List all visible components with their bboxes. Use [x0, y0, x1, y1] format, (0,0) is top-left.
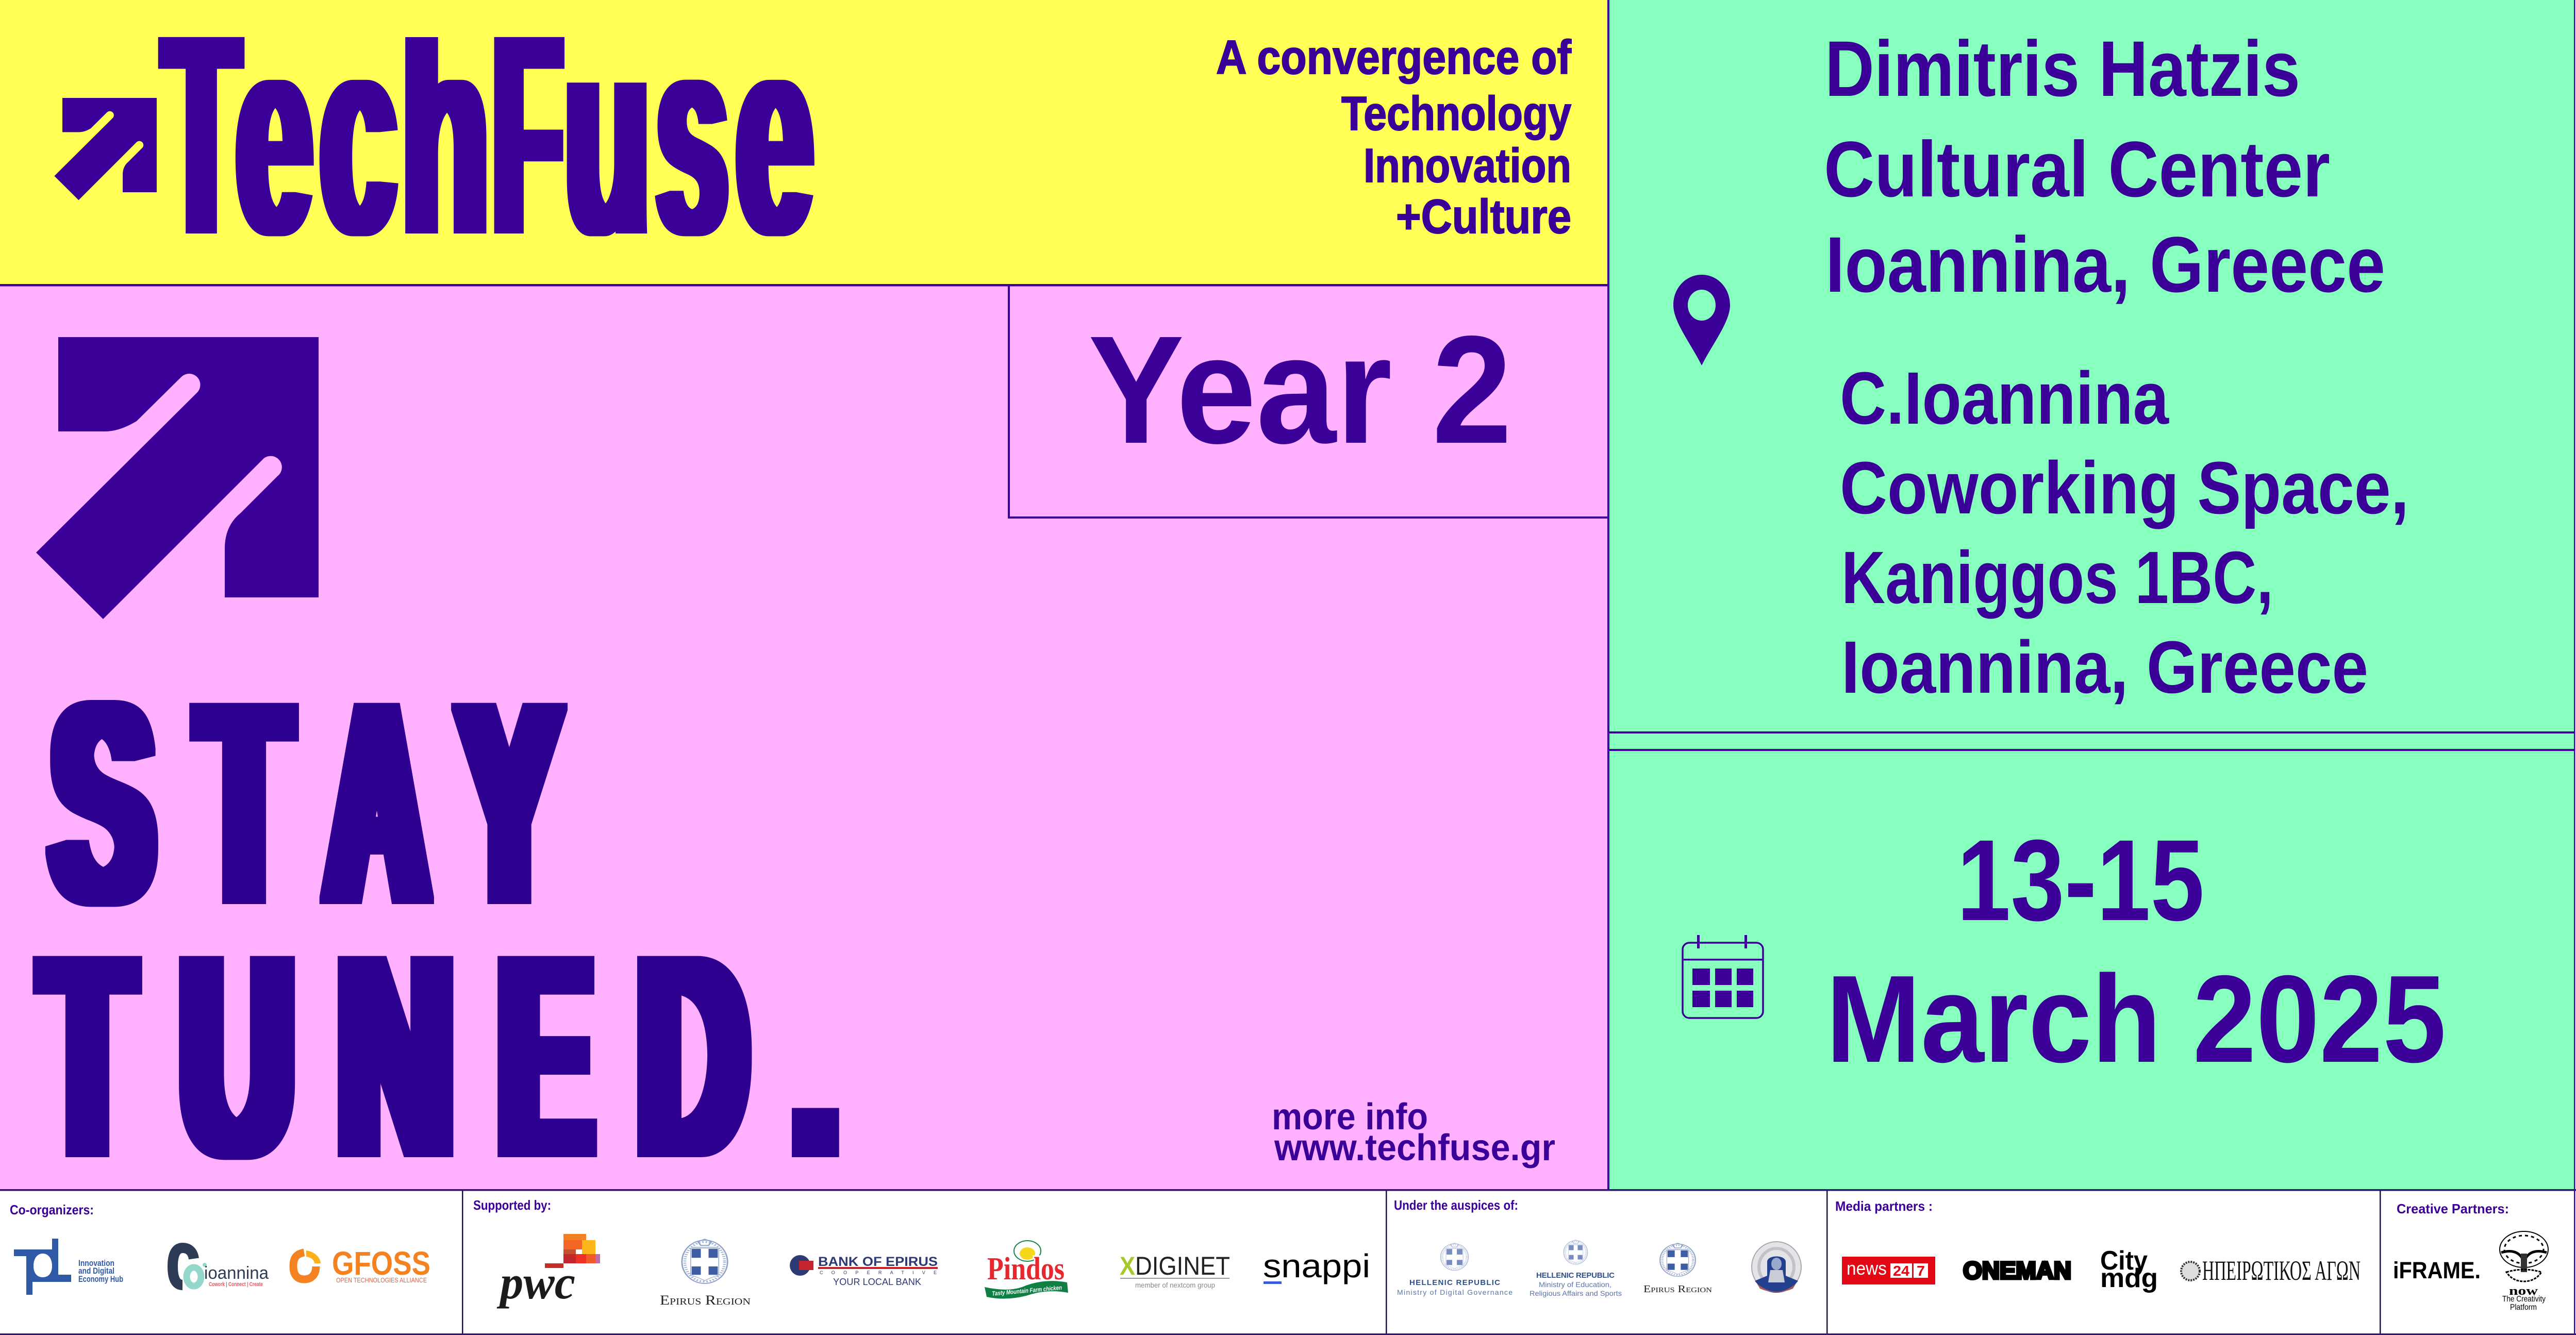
text block: dates: [1826, 816, 2446, 1089]
heading: TUNED.: D: [639, 898, 747, 1213]
heading: TUNED.: .: [791, 898, 840, 1213]
logo: pd Innovation and Digital Economy Hub: [14, 1239, 123, 1295]
logo: news247: [1842, 1257, 1935, 1284]
logo: news247: 7: [1917, 1263, 1925, 1279]
text block: venue 1: Cultural Center: [1824, 125, 2330, 213]
text block: venue 1: Ioannina, Greece: [1825, 221, 2385, 309]
logo: Bank of Epirus: BANK OF EPIRUS: [818, 1255, 938, 1269]
text block: dates: March 2025: [1826, 950, 2446, 1089]
logo: Pindos: Tasty Mountain Farm chicken: [992, 1284, 1062, 1297]
text block: venue 2: Kaniggos 1BC,: [1841, 536, 2273, 619]
logo: now tree: Platform: [2510, 1303, 2537, 1312]
logo: City mdg: mdg: [2100, 1263, 2158, 1293]
icon: calendar: [1683, 935, 1763, 1018]
logo: C ioannina: Cowork | Connect | Create: [209, 1281, 263, 1288]
heading: Creative Partners: Creative Partners:: [2397, 1201, 2509, 1216]
text block: more info: more info: [1272, 1096, 1428, 1138]
text block: tagline: [1216, 30, 1572, 243]
logo: City mdg: [2100, 1246, 2158, 1293]
logo: Epirus Region small: Epirus Region: [1643, 1283, 1712, 1295]
heading: STAY: T: [199, 645, 289, 960]
logo: Ministry of Education: HELLENIC REPUBLIC: [1536, 1271, 1615, 1280]
logo: Pindos: Pindos: [987, 1251, 1065, 1287]
logo: Ministry of Education: [1530, 1240, 1622, 1297]
heading: Co-organizers: Co-organizers:: [10, 1202, 94, 1217]
logo: pd Innovation and Digital Economy Hub: Economy Hub: [78, 1274, 123, 1284]
text block: tagline: A convergence of: [1216, 30, 1572, 84]
logo: City mdg: City: [2100, 1246, 2148, 1276]
logo: now tree: now: [2509, 1284, 2538, 1298]
logo: PwC: pwc: [496, 1256, 575, 1309]
logo: Ministry of Digital Governance: HELLENIC REPUBLIC: [1409, 1278, 1500, 1287]
text block: dates: 13-15: [1957, 816, 2204, 945]
text block: more info: www.techfuse.gr: [1274, 1127, 1555, 1169]
logo: XDIGINET: member of nextcom group: [1135, 1281, 1215, 1289]
logo: XDIGINET: DIGINET: [1135, 1251, 1230, 1280]
logo: snappi: snappi: [1263, 1247, 1370, 1284]
text block: venue 1: Dimitris Hatzis: [1825, 25, 2300, 113]
logo: Ipeirotikos Agon: ΗΠΕΙΡΩΤΙΚΟΣ ΑΓΩΝ: [2202, 1255, 2361, 1286]
text block: more info: [1272, 1096, 1555, 1169]
logo: Ministry of Education: Religious Affairs and Sports: [1530, 1289, 1622, 1297]
panel: pink main: [0, 286, 1607, 1190]
logo: GFOSS: OPEN TECHNOLOGIES ALLIANCE: [336, 1276, 427, 1284]
heading: TUNED.: T: [42, 898, 132, 1213]
panel: green venue background: [1609, 0, 2574, 1189]
logo: now tree: The Creativity: [2502, 1295, 2546, 1304]
logo: XDIGINET: X: [1120, 1251, 1135, 1280]
text block: tagline: Innovation: [1364, 139, 1571, 192]
logo: news247: news: [1847, 1258, 1887, 1279]
panel: Year 2 box: [1009, 285, 1608, 518]
icon: location pin: [1673, 275, 1730, 365]
logo: GFOSS: [293, 1245, 430, 1284]
heading: STAY: A: [327, 645, 426, 960]
logo: pd Innovation and Digital Economy Hub: and Digital: [78, 1266, 114, 1276]
text block: tagline: Technology: [1341, 87, 1571, 140]
logo: Bank of Epirus: [790, 1255, 938, 1287]
logo: C ioannina: ioannina: [204, 1263, 269, 1283]
logo: Ministry of Digital Governance: Ministry of Digital Governance: [1397, 1288, 1513, 1296]
logo: Pindos: [985, 1241, 1068, 1299]
heading: TUNED.: N: [338, 898, 453, 1213]
logo: XDIGINET: [1120, 1251, 1230, 1289]
text block: venue 1: [1824, 25, 2385, 309]
panel: white partner strip: [0, 1191, 2576, 1333]
logo: GFOSS: GFOSS: [332, 1245, 430, 1282]
logo: ONEMAN: ONEMAN: [1963, 1257, 2071, 1284]
logo: Ministry of Digital Governance: [1397, 1243, 1513, 1296]
logo: Epirus Region: [660, 1239, 751, 1308]
logo: news247: 24: [1893, 1263, 1909, 1279]
heading: STAY: S: [52, 645, 153, 960]
icon: small TechFuse arrow: [54, 98, 157, 200]
heading: TUNED.: U: [181, 898, 293, 1213]
logo: Bank of Epirus: YOUR LOCAL BANK: [833, 1277, 921, 1287]
logo: Bank of Epirus: COOPERATIVE: [820, 1270, 937, 1275]
text block: venue 2: Ioannina, Greece: [1841, 626, 2368, 709]
icon: large arrow: [36, 337, 319, 619]
heading: STAY: Y: [460, 645, 559, 960]
logo: iFRAME: iFRAME.: [2393, 1257, 2481, 1283]
logo: now tree: [2500, 1231, 2548, 1312]
heading: Media partners: Media partners :: [1835, 1198, 1933, 1214]
logo: Ipeirotikos Agon: [2181, 1255, 2361, 1286]
heading: TUNED.: E: [500, 898, 591, 1213]
logo: pd Innovation and Digital Economy Hub: Innovation: [78, 1258, 114, 1268]
logo: C ioannina: [173, 1248, 269, 1288]
logo: Ioannina seal: [1752, 1242, 1801, 1293]
text block: venue 2: [1840, 357, 2409, 709]
logo: PwC: [496, 1234, 600, 1309]
heading: Under the auspices of: Under the auspices of:: [1394, 1197, 1518, 1213]
panel: yellow header: [0, 0, 1607, 285]
logo: Ministry of Education: Ministry of Education,: [1539, 1280, 1611, 1289]
text block: venue 2: Coworking Space,: [1840, 446, 2409, 529]
logo: Epirus Region small: [1643, 1243, 1712, 1295]
text block: venue 2: C.Ioannina: [1840, 357, 2169, 440]
heading: Year 2: Year 2: [1088, 304, 1512, 476]
heading: Supported by: Supported by:: [473, 1197, 551, 1213]
logo: Epirus Region: Epirus Region: [660, 1293, 751, 1308]
text block: tagline: +Culture: [1396, 190, 1571, 243]
